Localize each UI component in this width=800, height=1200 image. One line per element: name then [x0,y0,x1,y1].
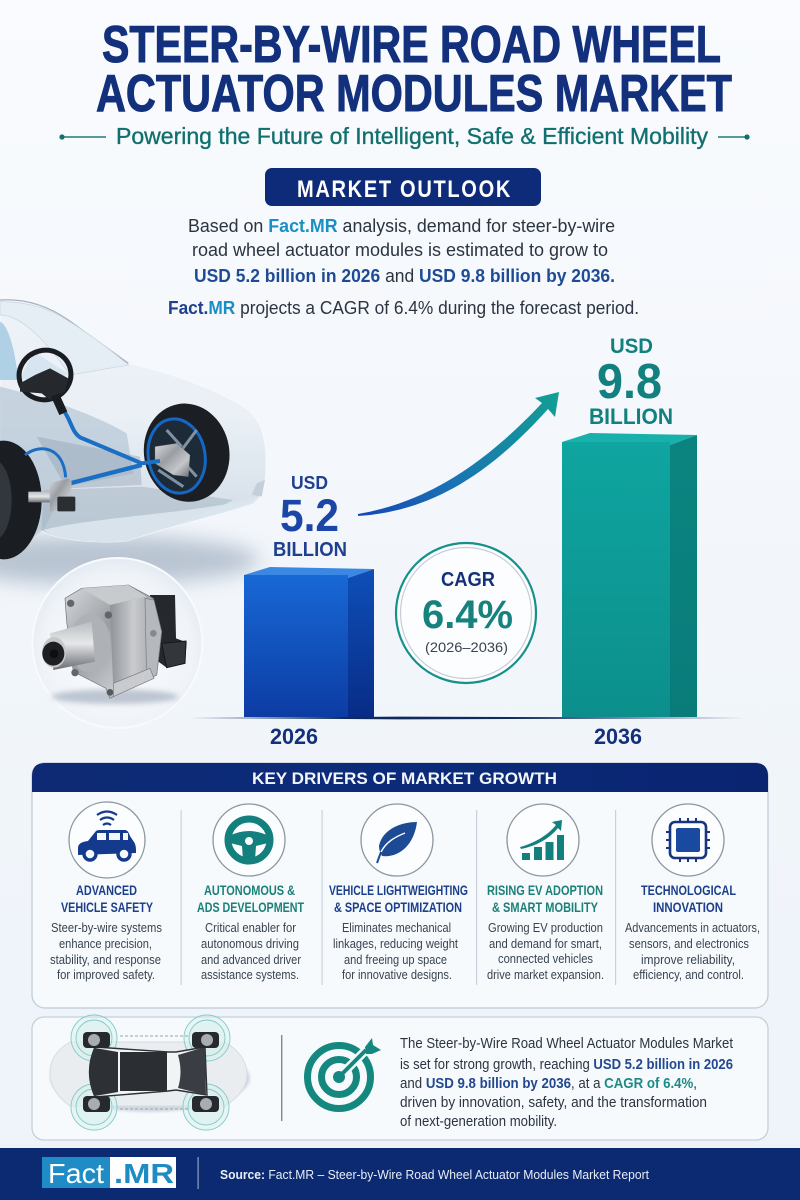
value label: USD 5.2 billion [273,473,347,561]
heading: AUTONOMOUS & [204,882,295,898]
heading: RISING EV ADOPTION [487,882,603,898]
description: Critical enabler for [205,921,296,935]
heading: & SMART MOBILITY [492,899,599,915]
value label: USD 9.8 billion: 9.8 [597,355,662,409]
summary text: of next-generation mobility. [400,1113,557,1130]
heading [197,882,304,915]
icon: steering wheel [213,804,285,876]
source: Source: Fact.MR – Steer-by-Wire Road Wheel Actuator Modules Market Report [220,1167,649,1182]
panel: key drivers [32,763,768,1008]
key drivers heading [32,763,768,792]
CAGR badge: 6.4% [422,593,513,637]
description: and advanced driver [201,953,301,967]
market outlook text [168,216,639,318]
market outlook text: Based on Fact.MR analysis, demand for steer-by-wire [188,216,615,236]
heading: ADS DEVELOPMENT [197,899,304,915]
summary text: is set for strong growth, reaching USD 5.2 billion in 2026 [400,1056,733,1073]
description: and freeing up space [344,953,447,967]
market outlook text: USD 5.2 billion in 2026 and USD 9.8 billion by 2036. [194,266,615,286]
market outlook heading [265,168,541,206]
value label: USD 5.2 billion: 5.2 [280,490,339,541]
CAGR badge [396,543,536,683]
icon: target with arrow [308,1038,381,1108]
heading: ADVANCED [76,882,137,898]
market outlook text: road wheel actuator modules is estimated to grow to [192,240,608,260]
subtitle: Powering the Future of Intelligent, Safe & Efficient Mobility [116,123,708,149]
description: assistance systems. [201,968,299,982]
heading: & SPACE OPTIMIZATION [334,899,462,915]
description [50,921,162,982]
icon: microchip [652,804,724,876]
description: stability, and response [50,953,161,967]
panel: summary [32,1015,768,1140]
description: efficiency, and control. [633,968,744,982]
driver: autonomous and ADS development [197,804,304,982]
heading: VEHICLE SAFETY [61,899,154,915]
logo: .MR [114,1158,174,1189]
bar: 2036 [562,433,697,717]
driver: advanced vehicle safety [50,802,162,982]
description: improve reliability, [641,953,735,967]
description: Advancements in actuators, [625,921,760,935]
icon: connected car [69,802,145,878]
illustration: top view of car [50,1015,250,1130]
footer [0,1148,800,1200]
description [625,921,760,982]
heading [641,882,736,915]
key drivers heading: KEY DRIVERS OF MARKET GROWTH [252,769,557,788]
description: enhance precision, [59,937,152,951]
icon: leaf [361,804,433,876]
heading: VEHICLE LIGHTWEIGHTING [329,882,468,898]
driver: vehicle lightweighting [329,804,468,982]
description [333,921,458,982]
description [487,921,604,982]
heading [487,882,603,915]
description: for improved safety. [57,968,155,982]
driver: rising EV adoption [487,804,604,982]
summary text: and USD 9.8 billion by 2036, at a CAGR of 6.4%, [400,1075,697,1092]
heading [329,882,468,915]
value label: USD 9.8 billion [589,335,673,429]
year label 2036: 2036 [594,724,642,749]
logo: Fact [48,1158,104,1189]
description: for innovative designs. [342,968,452,982]
icon: growth chart [507,804,579,876]
description [201,921,301,982]
description: autonomous driving [201,937,299,951]
summary text: driven by innovation, safety, and the transformation [400,1094,707,1111]
CAGR badge: (2026–2036) [425,640,508,655]
description: Steer-by-wire systems [51,921,162,935]
year label 2026: 2026 [270,724,318,749]
heading [61,882,154,915]
value label: USD 5.2 billion: USD [291,473,328,493]
CAGR badge: CAGR [441,569,496,591]
value label: USD 9.8 billion: BILLION [589,404,673,429]
description: linkages, reducing weight [333,937,458,951]
bar: 2026 [244,567,374,717]
title [96,16,732,123]
description: connected vehicles [498,952,593,966]
chart baseline [190,717,745,719]
illustration: actuator module [32,558,202,728]
heading: INNOVATION [653,899,723,915]
market outlook heading: MARKET OUTLOOK [297,176,512,203]
value label: USD 5.2 billion: BILLION [273,539,347,561]
bar chart: 2026 to 2036 [190,433,745,749]
illustration: car with steer-by-wire system [0,300,266,585]
summary text [400,1035,734,1130]
description: and demand for smart, [489,937,602,951]
heading: TECHNOLOGICAL [641,882,736,898]
value label: USD 9.8 billion: USD [610,335,653,358]
logo [42,1157,176,1189]
summary text: The Steer-by-Wire Road Wheel Actuator Modules Market [400,1035,734,1052]
market outlook text: Fact.MR projects a CAGR of 6.4% during the forecast period. [168,298,639,318]
description: sensors, and electronics [629,937,749,951]
driver: technological innovation [625,804,760,982]
description: Growing EV production [488,921,603,935]
description: drive market expansion. [487,968,604,982]
growth arrow [358,392,559,516]
description: Eliminates mechanical [342,921,451,935]
